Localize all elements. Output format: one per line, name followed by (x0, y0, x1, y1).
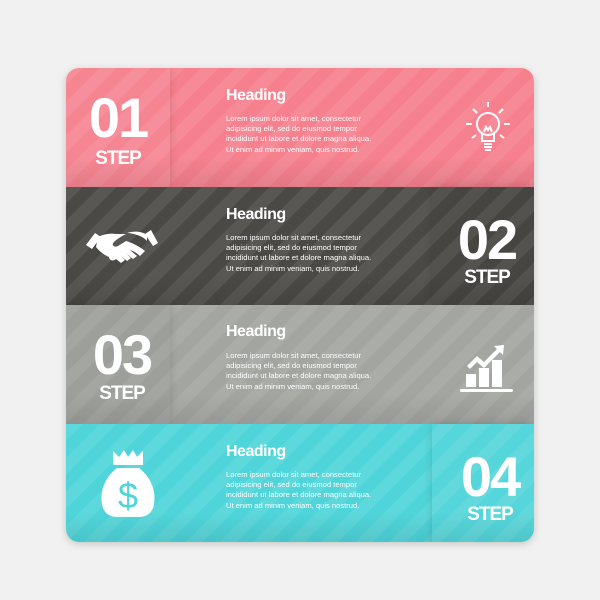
icon: growth chart (460, 345, 513, 392)
heading 03: Heading (226, 323, 286, 340)
icon: money bag: $ (118, 475, 138, 516)
panel: step 04 (66, 424, 534, 542)
step label 04: STEP (467, 504, 513, 525)
text 01: Ut enim ad minim veniam, quis nostrud. (226, 145, 359, 154)
panel: step 03 (66, 305, 534, 424)
text 04: Lorem ipsum dolor sit amet, consectetur (226, 470, 361, 479)
text 04: Ut enim ad minim veniam, quis nostrud. (226, 501, 359, 510)
number 03: 03 (93, 323, 151, 386)
heading 01: Heading (226, 87, 286, 104)
step label 03: STEP (99, 383, 145, 404)
heading 02: Heading (226, 206, 286, 223)
step label 01: STEP (95, 148, 141, 169)
heading 04: Heading (226, 443, 286, 460)
text 04 (226, 470, 371, 510)
panel: step 01 (66, 68, 534, 187)
text 01: Lorem ipsum dolor sit amet, consectetur (226, 114, 361, 123)
card (66, 68, 534, 542)
text 04: incididunt ut labore et dolore magna aliqua. (226, 490, 371, 499)
text 04: adipisicing elit, sed do eiusmod tempor (226, 480, 357, 489)
text 03: incididunt ut labore et dolore magna aliqua. (226, 371, 371, 380)
text 03: adipisicing elit, sed do eiusmod tempor (226, 361, 357, 370)
text 02: adipisicing elit, sed do eiusmod tempor (226, 243, 357, 252)
text 03: Lorem ipsum dolor sit amet, consectetur (226, 351, 361, 360)
number 04: 04 (461, 445, 519, 508)
text 01: adipisicing elit, sed do eiusmod tempor (226, 124, 357, 133)
text 01 (226, 114, 371, 154)
text 02: Ut enim ad minim veniam, quis nostrud. (226, 264, 359, 273)
text 02 (226, 233, 371, 273)
number 02: 02 (458, 208, 516, 271)
text 03 (226, 351, 371, 391)
text 03: Ut enim ad minim veniam, quis nostrud. (226, 382, 359, 391)
text 01: incididunt ut labore et dolore magna aliqua. (226, 134, 371, 143)
text 02: incididunt ut labore et dolore magna aliqua. (226, 253, 371, 262)
icon: lightbulb (466, 102, 510, 151)
icon: money bag (102, 450, 154, 517)
icon: handshake (86, 230, 158, 263)
panel: step 02 (66, 187, 534, 305)
step label 02: STEP (464, 267, 510, 288)
number 01: 01 (89, 86, 147, 149)
text 02: Lorem ipsum dolor sit amet, consectetur (226, 233, 361, 242)
